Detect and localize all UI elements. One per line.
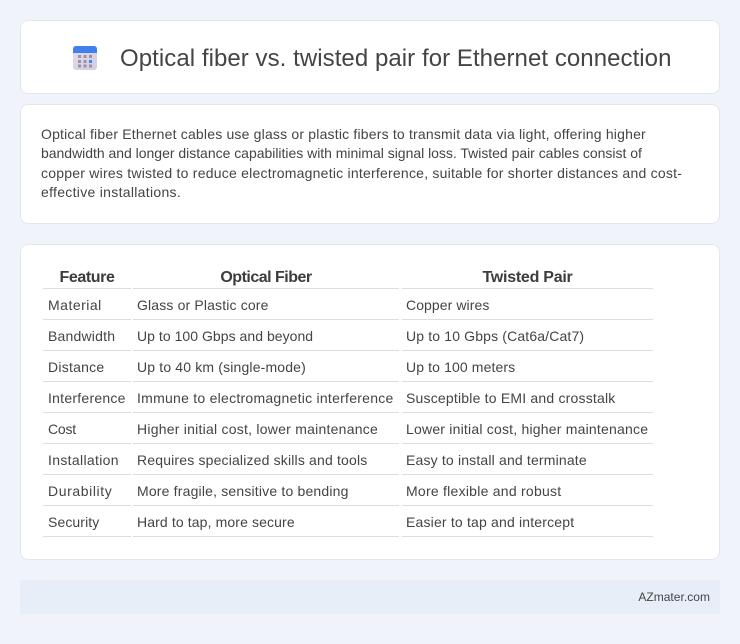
row: interference: [48, 390, 616, 406]
row: installation: Installation: [48, 452, 119, 468]
row: durability: [48, 483, 562, 499]
panel: comparison table: [20, 244, 720, 560]
text block: bandwidth and longer distance capabilities with minimal signal loss. Twisted pair cables consist of: [41, 145, 642, 161]
text block: copper wires twisted to reduce electromagnetic interference, suitable for shorter distances and cost-: [41, 164, 682, 180]
row: security: [48, 514, 574, 530]
row: cost: Cost: [48, 421, 76, 437]
table header: Optical Fiber: [220, 269, 312, 286]
row: security: Hard to tap, more secure: [137, 514, 295, 530]
row: durability: More fragile, sensitive to bending: [137, 483, 349, 499]
row: distance: Up to 100 meters: [406, 359, 515, 375]
footer credit: AZmater.com: [638, 590, 710, 604]
heading: Optical fiber vs. twisted pair for Ethernet connection: [120, 45, 672, 72]
row: cost: Higher initial cost, lower maintenance: [137, 421, 378, 437]
footer bar: [20, 580, 720, 614]
row: bandwidth: Bandwidth: [48, 328, 115, 344]
table header: Feature: [60, 269, 114, 286]
panel: title: [20, 20, 720, 94]
row: interference: Interference: [48, 390, 126, 406]
row: bandwidth: Up to 100 Gbps and beyond: [137, 328, 313, 344]
text block: [41, 126, 682, 200]
panel: description: [20, 104, 720, 224]
row: bandwidth: [48, 328, 584, 344]
text block: effective installations.: [41, 184, 181, 200]
row: bandwidth: Up to 10 Gbps (Cat6a/Cat7): [406, 328, 584, 344]
comparison table: [43, 269, 653, 537]
row: distance: Up to 40 km (single-mode): [137, 359, 306, 375]
row: material: Copper wires: [406, 297, 489, 313]
row: interference: Susceptible to EMI and crosstalk: [406, 390, 616, 406]
row: cost: [48, 421, 648, 437]
row: security: Security: [48, 514, 99, 530]
row: distance: [48, 359, 515, 375]
text block: Optical fiber Ethernet cables use glass or plastic fibers to transmit data via light, offering higher: [41, 126, 646, 142]
row: installation: Easy to install and terminate: [406, 452, 587, 468]
row: material: Material: [48, 297, 102, 313]
row: installation: [48, 452, 587, 468]
row: cost: Lower initial cost, higher maintenance: [406, 421, 648, 437]
row: material: [48, 297, 489, 313]
table header: Twisted Pair: [482, 269, 573, 286]
row: durability: More flexible and robust: [406, 483, 561, 499]
icon: calendar grid: [73, 46, 97, 70]
row: durability: Durability: [48, 483, 112, 499]
row: installation: Requires specialized skills and tools: [137, 452, 367, 468]
row: distance: Distance: [48, 359, 104, 375]
row: interference: Immune to electromagnetic interference: [137, 390, 394, 406]
row: material: Glass or Plastic core: [137, 297, 269, 313]
row: security: Easier to tap and intercept: [406, 514, 574, 530]
table header: [60, 269, 573, 286]
